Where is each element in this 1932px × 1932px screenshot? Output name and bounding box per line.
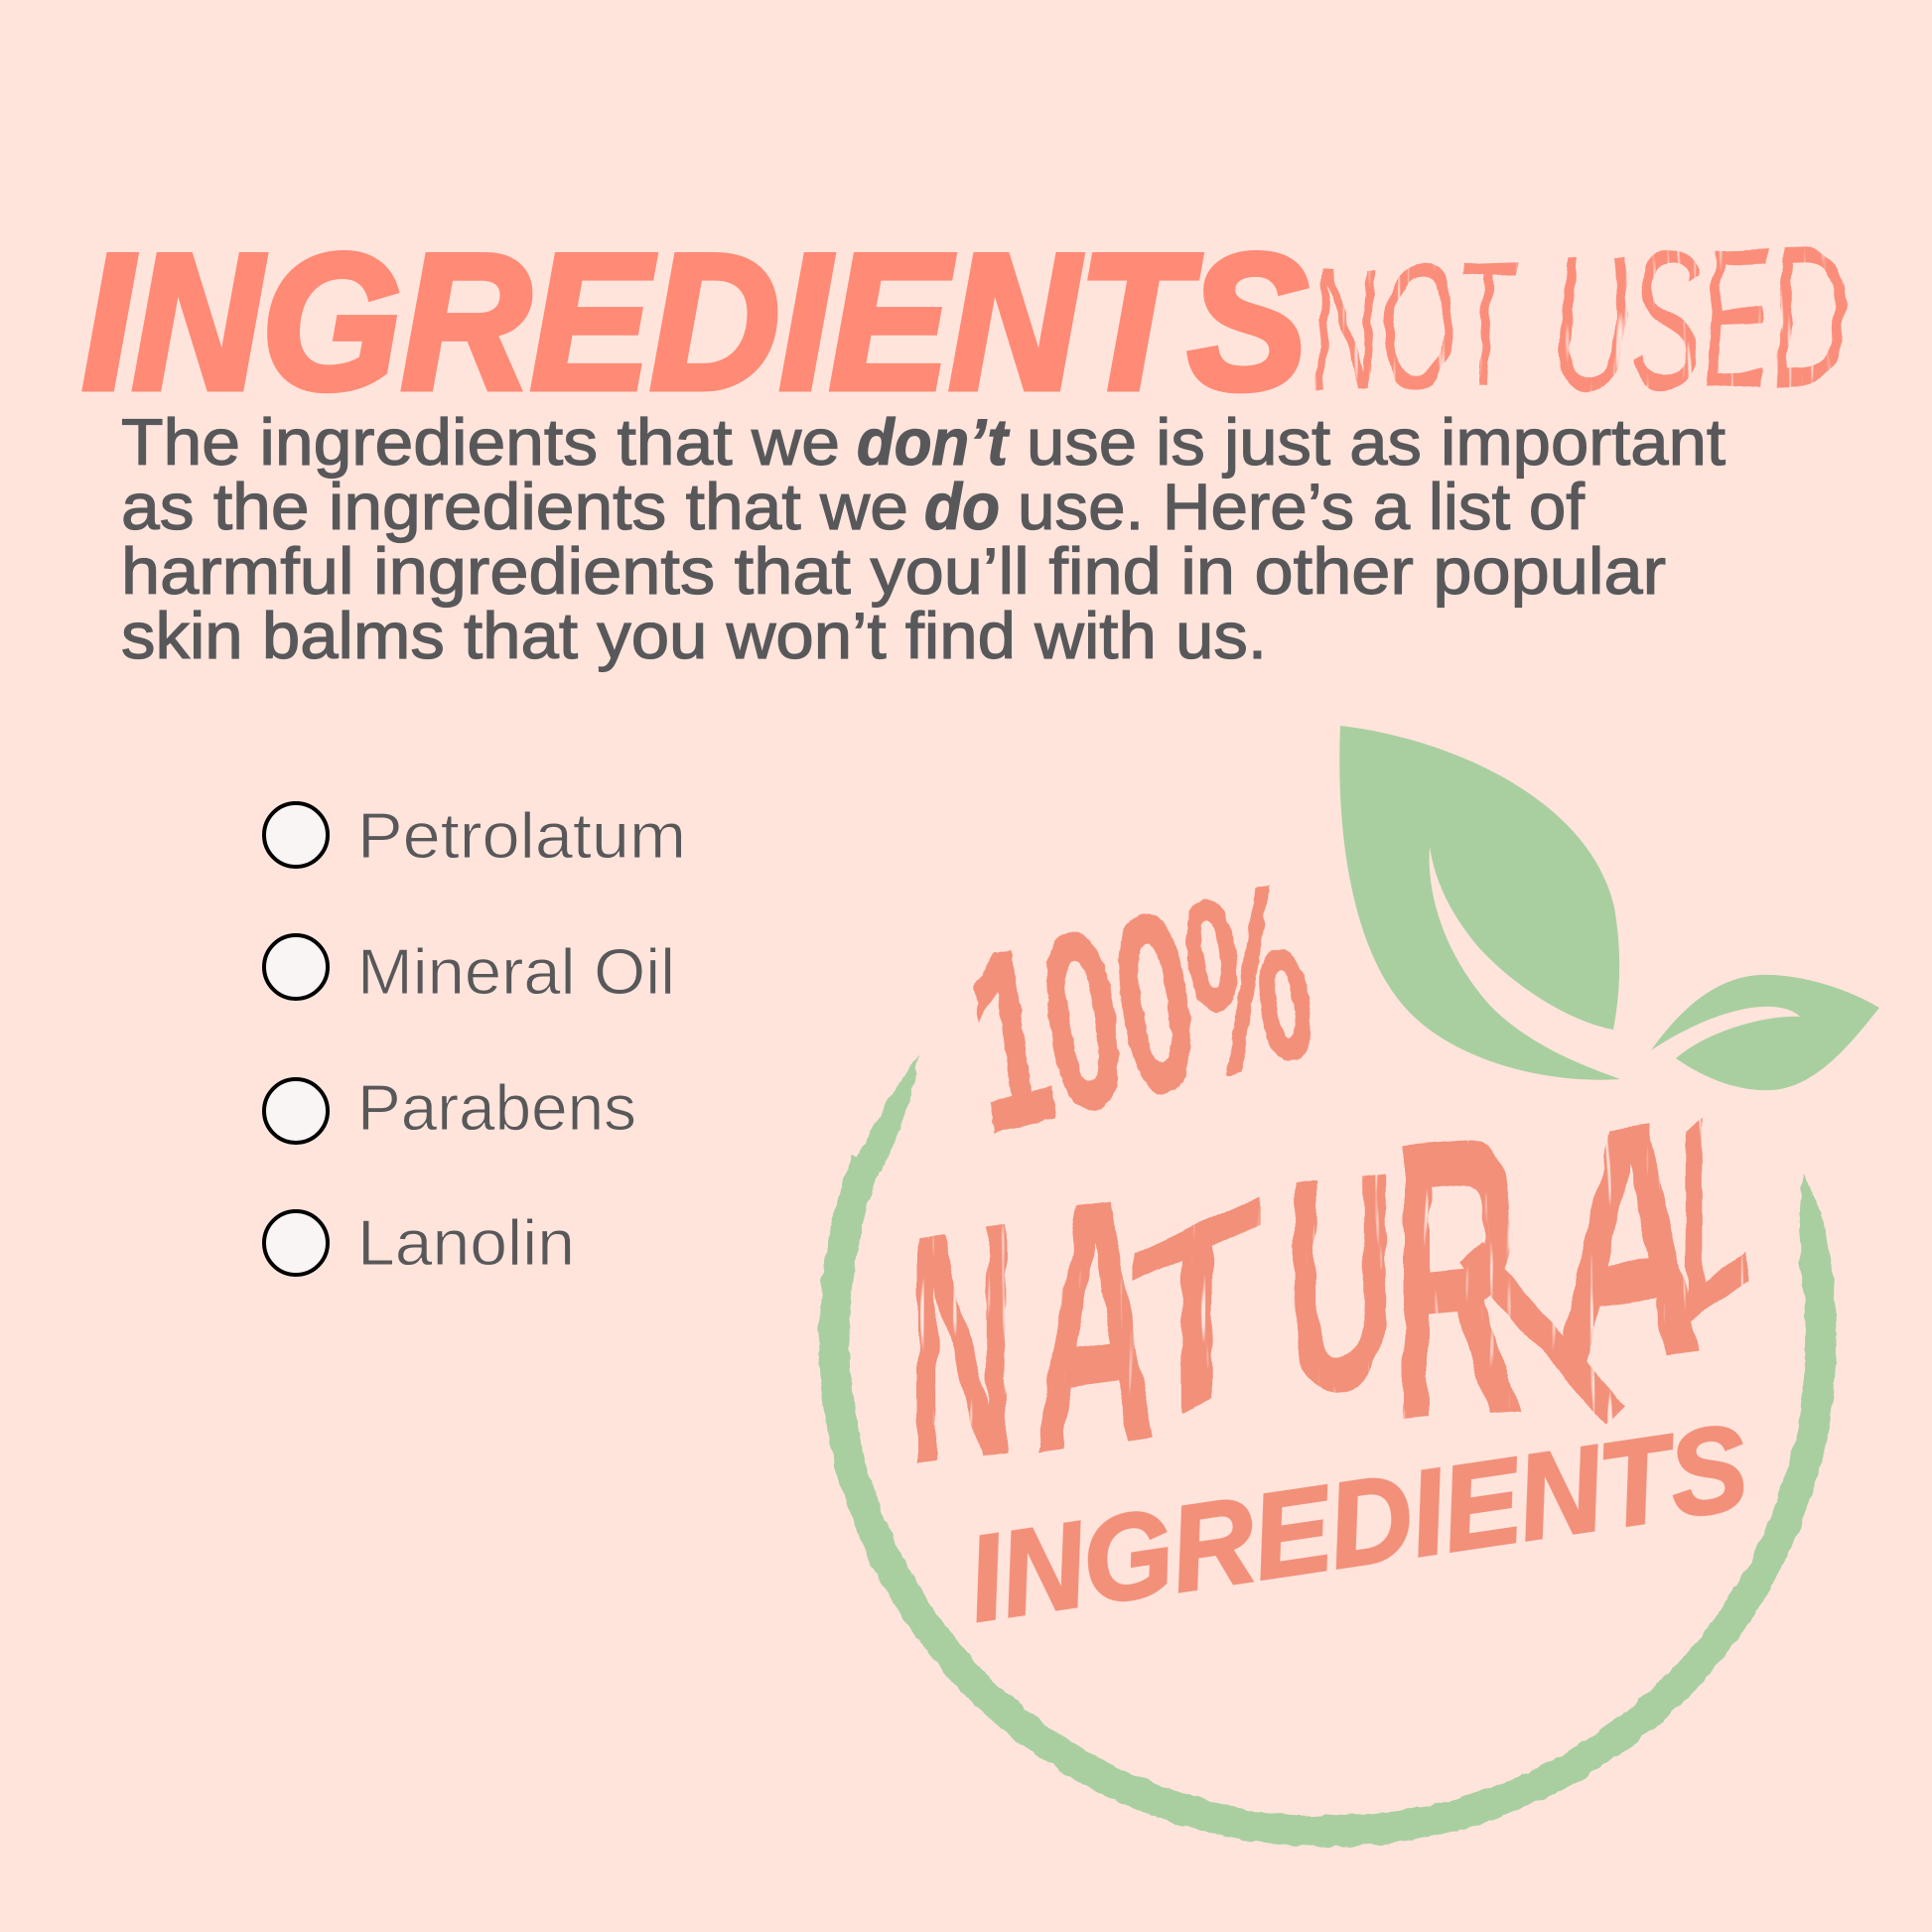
logo: 100% natural ingredients badge <box>834 726 1879 1832</box>
intro paragraph: The ingredients that we <box>121 405 840 479</box>
list item: Parabens: Parabens <box>357 1071 636 1144</box>
list item: Lanolin: Lanolin <box>357 1206 575 1279</box>
intro paragraph: use. Here’s a list of <box>1018 470 1586 543</box>
title: NOT USED: NOT <box>1307 224 1523 429</box>
badge text: 100%: 100% <box>938 831 1338 1182</box>
title <box>82 205 1852 436</box>
icon: small leaf <box>1651 975 1879 1090</box>
badge text: INGREDIENTS: INGREDIENTS <box>960 1399 1755 1647</box>
ingredient list <box>264 799 686 1279</box>
icon: ring around the badge <box>834 1055 1831 1832</box>
intro paragraph: do <box>924 470 1000 543</box>
logo: 100% natural ingredients badge: L <box>1678 1023 1749 1390</box>
list item: Mineral Oil: Mineral Oil <box>357 935 675 1008</box>
list item: Petrolatum: Petrolatum <box>357 799 686 872</box>
badge text: NATURAL <box>908 1023 1749 1539</box>
badge text: NATURAL: A <box>1551 1041 1705 1446</box>
badge text: NATURAL: A <box>1031 1122 1158 1528</box>
intro paragraph: use is just as important <box>1027 405 1725 479</box>
badge text: NATURAL: N <box>908 1152 1016 1539</box>
badge text: NATURAL: U <box>1286 1105 1395 1458</box>
icon: big leaf <box>1339 726 1620 1080</box>
title: NOT USED <box>1307 205 1852 436</box>
badge text: NATURAL: R <box>1392 1050 1521 1506</box>
list item: Lanolin <box>264 1206 575 1279</box>
title: INGREDIENTS: INGREDIENTS <box>82 214 1308 430</box>
intro paragraph <box>121 405 1725 672</box>
intro paragraph: skin balms that you won’t find with us. <box>121 599 1267 672</box>
intro paragraph: harmful ingredients that you’ll find in other popular <box>121 534 1666 608</box>
badge text: NATURAL: T <box>1131 1137 1263 1492</box>
intro paragraph: don’t <box>857 405 1011 479</box>
intro paragraph: as the ingredients that we <box>121 470 908 543</box>
